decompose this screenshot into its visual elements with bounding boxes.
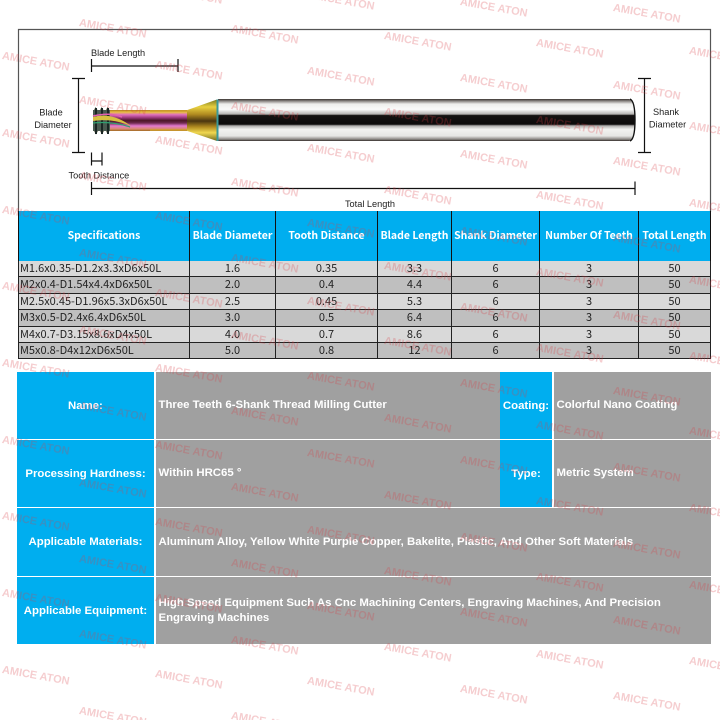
watermark layer: AMICE ATON (459, 606, 528, 630)
watermark layer: AMICE ATON (1, 50, 70, 74)
dimension: blade diameter: Blade (39, 108, 63, 118)
specifications table: 3 (586, 276, 592, 292)
specifications table: Shank Diameter (454, 228, 537, 243)
product information table: Type: (511, 468, 541, 480)
dimension: blade length (91, 48, 178, 72)
specifications table: 6 (492, 260, 499, 276)
product information table: Metric System (556, 467, 634, 479)
dimension: shank diameter: Diameter (649, 120, 686, 130)
product information table: Name: (68, 400, 103, 412)
watermark layer: AMICE ATON (459, 225, 528, 249)
specifications table: 0.35 (316, 260, 337, 276)
dimension: blade length: Blade Length (91, 48, 145, 58)
watermark layer: AMICE ATON (535, 571, 604, 595)
specifications table: Specifications (68, 228, 140, 243)
watermark layer: AMICE ATON (230, 23, 299, 47)
watermark layer: AMICE ATON (612, 538, 681, 562)
watermark layer: AMICE ATON (1, 204, 70, 228)
cutter thread teeth (93, 107, 131, 134)
dimension: blade diameter (34, 78, 85, 152)
watermark layer: AMICE ATON (1, 434, 70, 458)
watermark layer: AMICE ATON (306, 295, 375, 319)
watermark layer: AMICE ATON (612, 309, 681, 333)
cutter coated neck and cone (108, 100, 218, 141)
watermark layer: AMICE ATON (1, 127, 70, 151)
dimension: shank diameter: Shank (653, 107, 679, 117)
specifications table: 50 (668, 260, 681, 276)
watermark layer: AMICE ATON (383, 565, 452, 589)
watermark layer: AMICE ATON (383, 335, 452, 359)
watermark layer: AMICE ATON (383, 184, 452, 208)
watermark layer: AMICE ATON (154, 59, 223, 83)
watermark layer: AMICE ATON (78, 628, 147, 652)
watermark layer: AMICE ATON (306, 370, 375, 394)
dimension: tooth distance (68, 152, 129, 180)
watermark layer: AMICE ATON (154, 210, 223, 234)
watermark layer: AMICE ATON (612, 79, 681, 103)
specifications table: 4.0 (225, 326, 240, 342)
watermark layer: AMICE ATON (383, 260, 452, 284)
dimension: blade diameter: Diameter (34, 120, 72, 130)
specifications table: 8.6 (407, 326, 422, 342)
watermark layer: AMICE ATON (612, 155, 681, 179)
watermark layer: AMICE ATON (306, 217, 375, 241)
specifications table: 3.3 (407, 260, 422, 276)
watermark layer: AMICE ATON (154, 668, 223, 692)
specifications table: 2.0 (225, 276, 240, 292)
specifications table: Tooth Distance (288, 228, 365, 243)
watermark layer: AMICE ATON (383, 412, 452, 436)
specifications table: M4x0.7-D3.15x8.6xD4x50L (20, 326, 152, 342)
watermark layer: AMICE ATON (459, 72, 528, 96)
watermark layer: AMICE ATON (459, 301, 528, 325)
watermark layer: AMICE ATON (154, 439, 223, 463)
specifications table: 3 (586, 293, 592, 309)
watermark layer: AMICE ATON (78, 553, 147, 577)
specifications table: 50 (668, 342, 681, 358)
watermark layer: AMICE ATON (78, 247, 147, 271)
specifications table: 4.4 (407, 276, 422, 292)
specifications table: 12 (408, 342, 421, 358)
specifications table (18, 211, 711, 359)
watermark layer: AMICE ATON (306, 447, 375, 471)
watermark layer: AMICE ATON (612, 690, 681, 714)
specifications table: M5x0.8-D4x12xD6x50L (20, 342, 134, 358)
watermark layer: AMICE ATON (78, 170, 147, 194)
watermark layer: AMICE ATON (154, 134, 223, 158)
watermark layer: AMICE ATON (230, 557, 299, 581)
specifications table: 0.4 (319, 276, 334, 292)
watermark layer: AMICE ATON (383, 30, 452, 54)
specifications table: 6 (492, 342, 499, 358)
specifications table: 2.5 (225, 293, 240, 309)
watermark layer: AMICE ATON (383, 106, 452, 130)
specifications table: Blade Length (380, 228, 449, 243)
watermark layer: AMICE ATON (230, 100, 299, 124)
watermark layer: AMICE ATON (78, 17, 147, 41)
dimension: total length (92, 182, 635, 209)
specifications table: 5.3 (407, 293, 422, 309)
product information table: Colorful Nano Coating (556, 399, 677, 411)
product information table: Applicable Materials: (29, 536, 142, 548)
watermark layer: AMICE ATON (1, 510, 70, 534)
product information table: Three Teeth 6-Shank Thread Milling Cutter (158, 399, 387, 411)
watermark layer: AMICE ATON (1, 357, 70, 381)
specifications table: 50 (668, 276, 681, 292)
product information table: Aluminum Alloy, Yellow White Purple Copper, Bakelite, Plastic, And Other Soft Materials (158, 536, 633, 548)
watermark layer: AMICE ATON (535, 266, 604, 290)
watermark layer: AMICE ATON (535, 342, 604, 366)
watermark layer: AMICE ATON (230, 481, 299, 505)
watermark layer: AMICE ATON (535, 114, 604, 138)
specifications table: M1.6x0.35-D1.2x3.3xD6x50L (20, 260, 161, 276)
specifications table: 0.8 (319, 342, 334, 358)
specifications table: Blade Diameter (193, 228, 272, 243)
specifications table: 6 (492, 326, 499, 342)
specifications table: 6 (492, 276, 499, 292)
product information table: Processing Hardness: (25, 468, 146, 480)
watermark layer: AMICE ATON (535, 189, 604, 213)
watermark layer: AMICE ATON (230, 176, 299, 200)
dimension: tooth distance: Tooth Distance (68, 170, 129, 180)
watermark layer: AMICE ATON (383, 641, 452, 665)
watermark layer: AMICE ATON (306, 142, 375, 166)
watermark layer: AMICE ATON (78, 324, 147, 348)
watermark layer: AMICE ATON (306, 675, 375, 699)
product information table: High Speed Equipment Such As Cnc Machining Centers, Engraving Machines, And Precision Engraving Machines (158, 596, 661, 624)
specifications table: 3 (586, 260, 592, 276)
product information table: Applicable Equipment: (24, 604, 147, 616)
watermark layer: AMICE ATON (154, 362, 223, 386)
specifications table: 0.45 (316, 293, 337, 309)
specifications table: 6 (492, 309, 499, 325)
watermark layer: AMICE ATON (612, 385, 681, 409)
watermark layer: AMICE ATON (612, 2, 681, 26)
cutter shank (218, 99, 635, 141)
specifications table: 6.4 (407, 309, 422, 325)
product information table: Within HRC65 ° (158, 467, 241, 479)
watermark layer: AMICE ATON (535, 495, 604, 519)
diagram frame (18, 30, 710, 212)
watermark layer: AMICE ATON (78, 94, 147, 118)
watermark layer: AMICE ATON (306, 65, 375, 89)
watermark layer: AMICE ATON (78, 400, 147, 424)
watermark layer: AMICE ATON (230, 252, 299, 276)
watermark layer: AMICE ATON (1, 280, 70, 304)
watermark layer: AMICE ATON (230, 634, 299, 658)
specifications table: 50 (668, 293, 681, 309)
specifications table: M2x0.4-D1.54x4.4xD6x50L (20, 276, 152, 292)
watermark layer: AMICE ATON (78, 477, 147, 501)
specifications table: 3.0 (225, 309, 240, 325)
watermark layer: AMICE ATON (1, 587, 70, 611)
watermark layer: AMICE ATON (459, 531, 528, 555)
specifications table: Total Length (642, 228, 707, 243)
watermark layer: AMICE ATON (612, 461, 681, 485)
product information table: Coating: (503, 400, 549, 412)
watermark layer: AMICE ATON (306, 600, 375, 624)
specifications table: 0.7 (319, 326, 334, 342)
watermark layer: AMICE ATON (306, 524, 375, 548)
specifications table: M2.5x0.45-D1.96x5.3xD6x50L (20, 293, 167, 309)
watermark layer: AMICE ATON (459, 148, 528, 172)
panel: tool dimension diagram (18, 28, 712, 212)
watermark layer: AMICE ATON (154, 516, 223, 540)
specifications table: Number Of Teeth (545, 228, 633, 243)
watermark layer: AMICE ATON (230, 329, 299, 353)
specifications table: 50 (668, 309, 681, 325)
specifications table: 3 (586, 342, 592, 358)
watermark layer: AMICE ATON (459, 683, 528, 707)
watermark layer: AMICE ATON (612, 232, 681, 256)
specifications table: 3 (586, 309, 592, 325)
watermark layer: AMICE ATON (154, 287, 223, 311)
specifications table: 0.5 (319, 309, 334, 325)
specifications table: 6 (492, 293, 499, 309)
watermark layer: AMICE ATON (612, 614, 681, 638)
watermark layer: AMICE ATON (535, 419, 604, 443)
specifications table: 3 (586, 326, 592, 342)
watermark layer: AMICE ATON (154, 592, 223, 616)
specifications table: 50 (668, 326, 681, 342)
watermark layer: AMICE ATON (230, 405, 299, 429)
dimension: shank diameter (638, 78, 686, 152)
watermark layer: AMICE ATON (535, 37, 604, 61)
watermark layer: AMICE ATON (459, 454, 528, 478)
specifications table: 5.0 (225, 342, 240, 358)
watermark layer: AMICE ATON (459, 377, 528, 401)
specifications table: M3x0.5-D2.4x6.4xD6x50L (20, 309, 146, 325)
watermark layer: AMICE ATON (383, 489, 452, 513)
dimension: total length: Total Length (345, 199, 395, 209)
watermark layer: AMICE ATON (535, 648, 604, 672)
watermark layer: AMICE ATON (1, 664, 70, 688)
specifications table: 1.6 (225, 260, 240, 276)
